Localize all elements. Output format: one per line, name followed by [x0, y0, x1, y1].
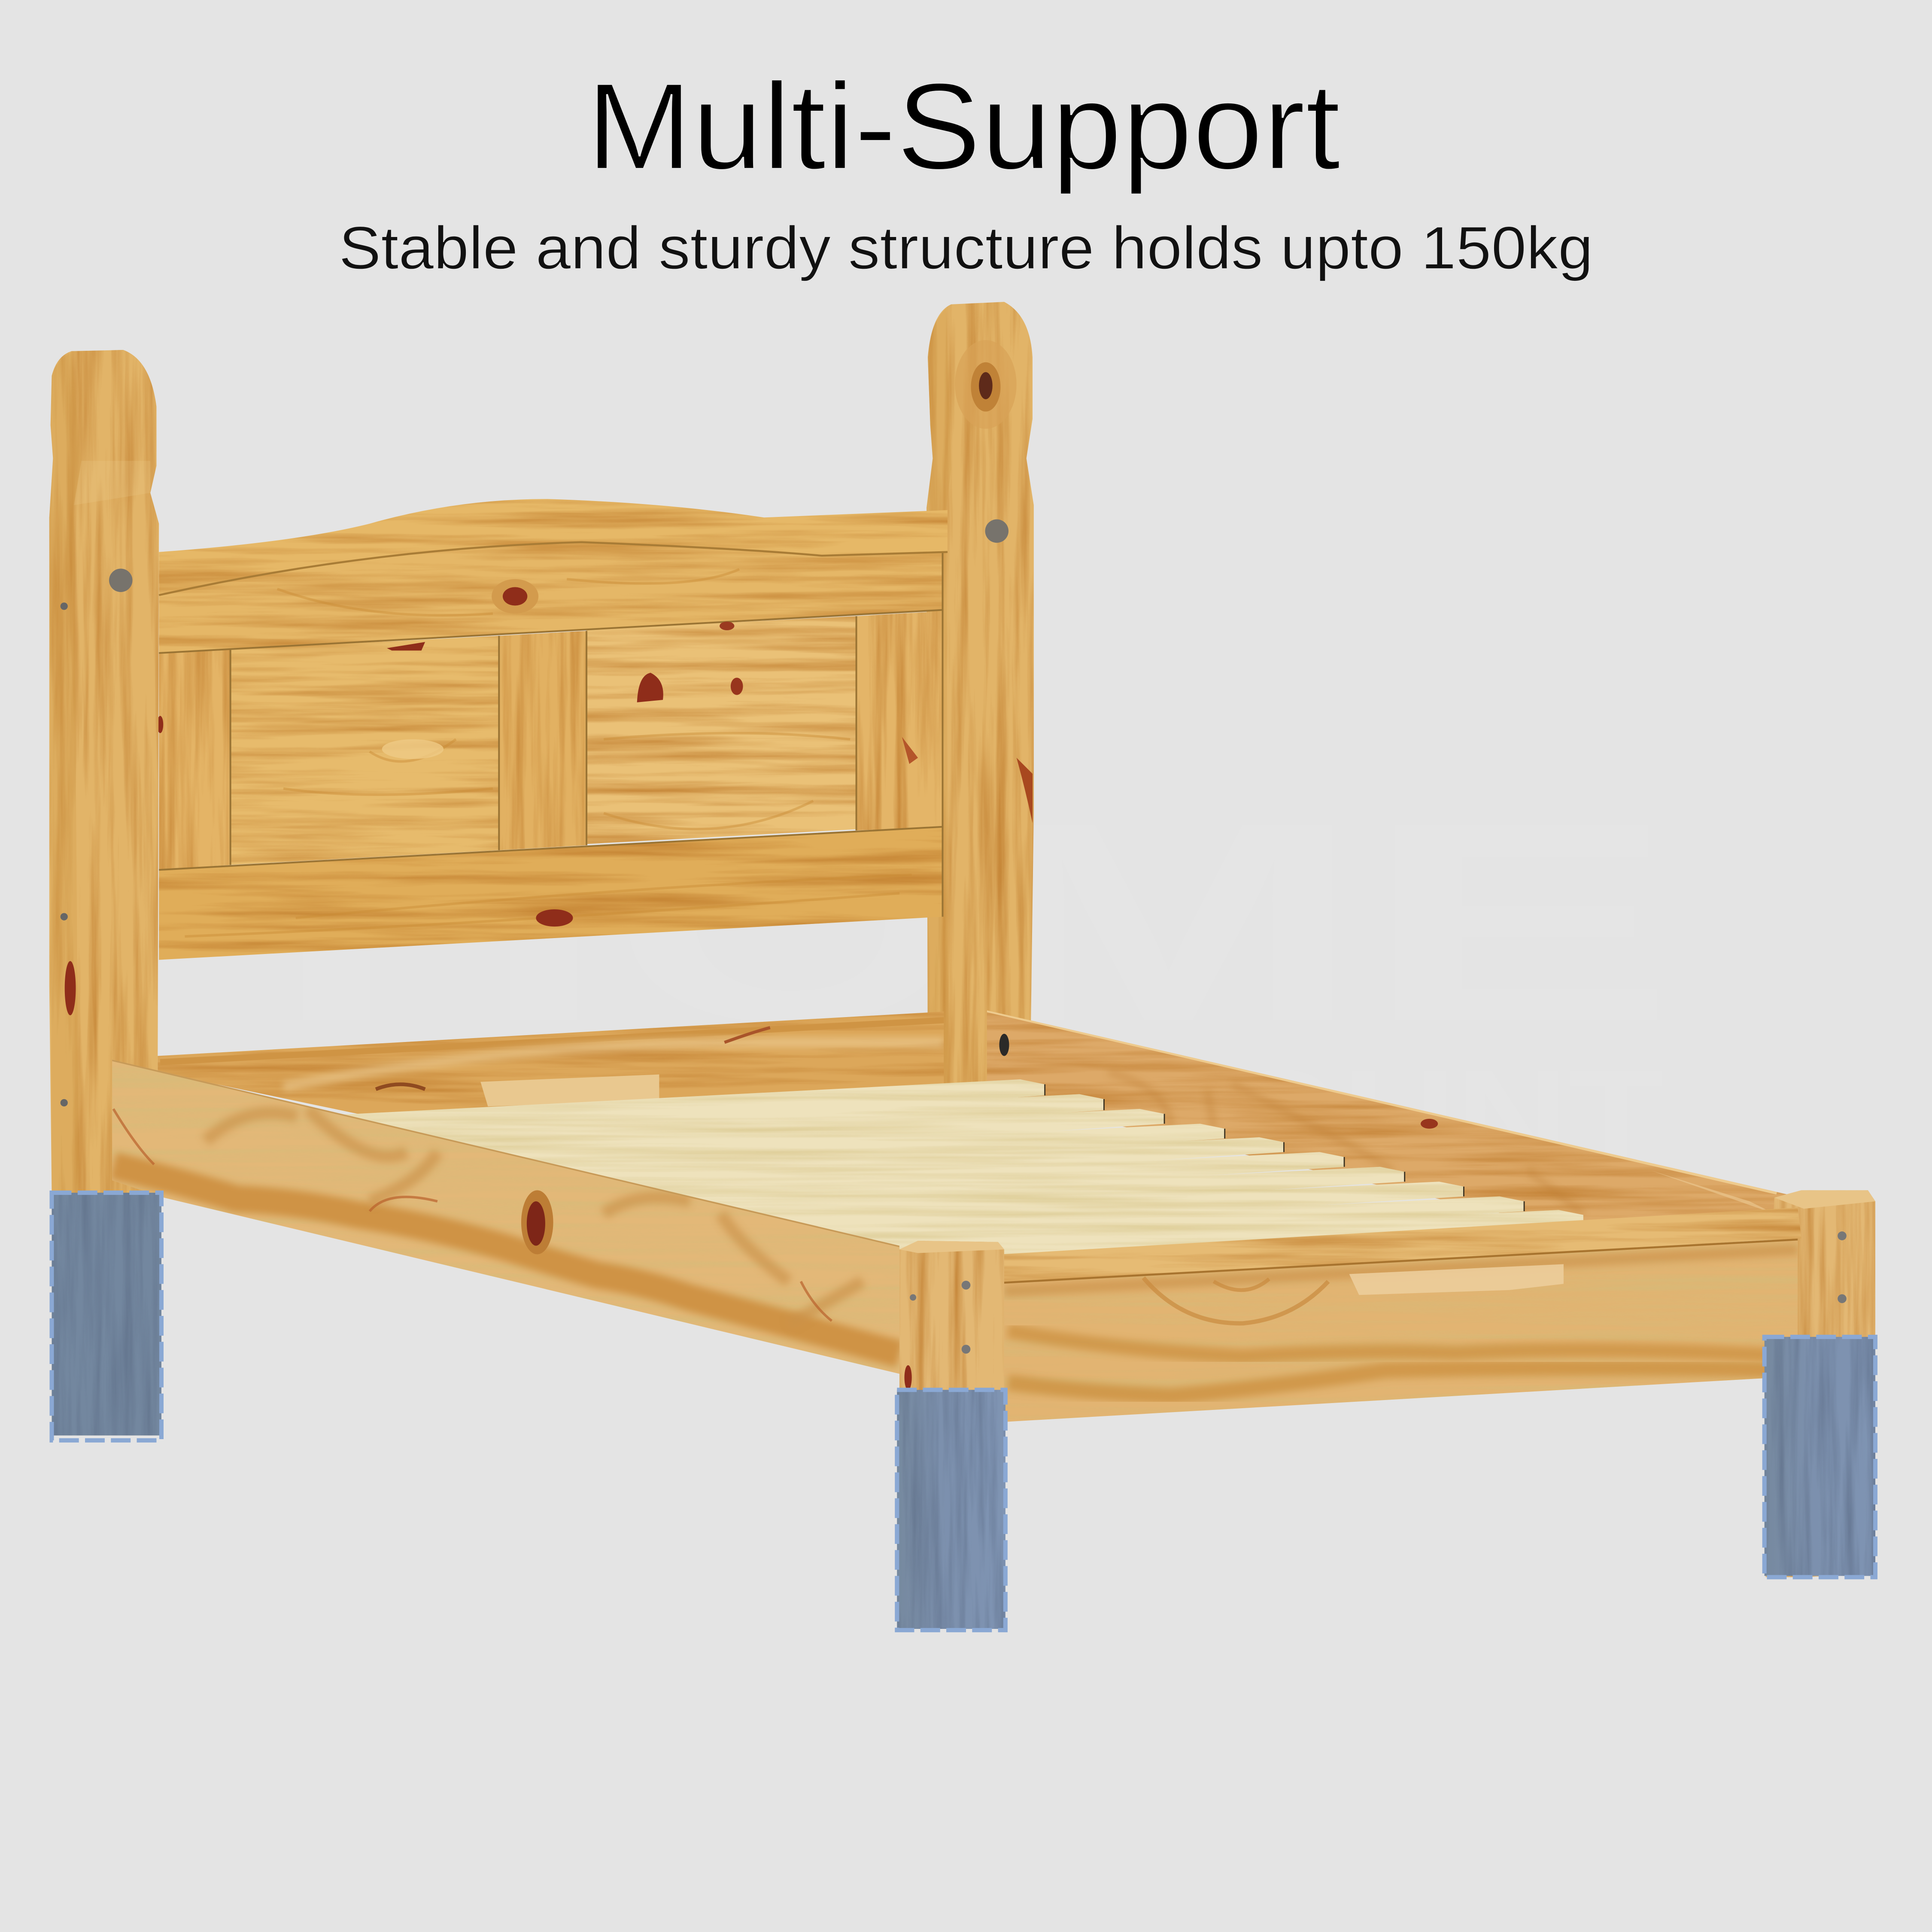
infographic canvas	[49, 80, 1877, 1632]
rail knot	[521, 1190, 553, 1255]
support leg: centre	[897, 1390, 1005, 1630]
foot rail	[1000, 1207, 1801, 1422]
left stile	[159, 649, 231, 870]
right raised panel	[586, 616, 857, 844]
foot rail panel	[1004, 1239, 1798, 1422]
bed frame	[49, 302, 1875, 1629]
support leg: right	[1765, 1337, 1875, 1577]
near side rail	[112, 1060, 899, 1374]
support leg: left	[52, 1193, 161, 1440]
faint watermark: HOME	[271, 763, 1676, 1080]
post bolt	[109, 568, 133, 592]
left head post	[49, 350, 159, 1195]
top rail	[159, 499, 948, 595]
right head post	[927, 302, 1034, 1084]
faint watermark	[271, 763, 1676, 1193]
title: Multi-Support	[586, 57, 1341, 196]
foot rail cap	[1000, 1207, 1801, 1283]
headboard	[157, 499, 948, 960]
subtitle: Stable and sturdy structure holds upto 150kg	[339, 214, 1593, 282]
left raised panel	[229, 636, 499, 865]
middle stile	[499, 631, 586, 850]
post screws	[61, 602, 68, 1106]
right stile	[857, 611, 942, 830]
top rail shadow line	[159, 542, 948, 595]
far side rail	[987, 1010, 1801, 1232]
foot rail patch	[1349, 1264, 1564, 1295]
far foot post	[1766, 1190, 1875, 1577]
slat end shadows	[1045, 1084, 1524, 1211]
grain swirls	[185, 569, 912, 936]
slats	[308, 1079, 1583, 1306]
bottom rail	[159, 827, 942, 960]
near foot post	[899, 1241, 1004, 1629]
knot cluster	[157, 579, 918, 927]
head end rail	[158, 1012, 944, 1116]
panel joint lines	[159, 552, 942, 917]
highlighted support legs	[52, 1193, 1875, 1630]
left leg lower wood	[52, 1193, 158, 1435]
faint watermark: COUNT	[1109, 1042, 1663, 1193]
headboard top strip	[159, 542, 942, 653]
